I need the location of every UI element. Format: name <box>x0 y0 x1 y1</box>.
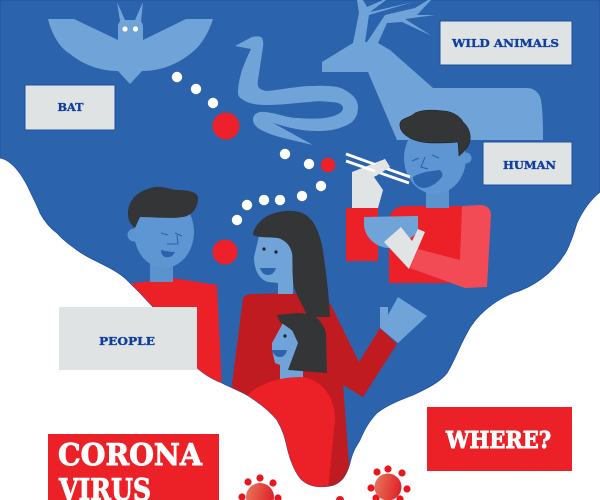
callout: where <box>427 407 572 471</box>
label: human <box>483 142 572 185</box>
label: wild animals <box>440 21 572 65</box>
title: corona virus: CORONA <box>58 438 203 473</box>
title: corona virus <box>48 434 219 500</box>
figure: human eating <box>346 110 491 288</box>
icon: virus bottom spike <box>336 496 344 500</box>
figures: family group <box>120 187 427 490</box>
red transmission dot: near people <box>212 240 238 264</box>
icon: bat <box>48 2 213 84</box>
icon: deer <box>322 0 543 140</box>
label: bat <box>25 85 115 130</box>
label: people: PEOPLE <box>99 335 155 348</box>
figure: woman <box>230 211 427 490</box>
red transmission dot: near human <box>321 158 335 172</box>
figure: man <box>128 186 222 383</box>
icon: snake <box>235 36 358 145</box>
label: wild animals: WILD ANIMALS <box>451 37 559 50</box>
dots: bat to human path <box>172 72 326 225</box>
icon: virus right <box>367 465 411 500</box>
red transmission dot: near bat <box>212 112 240 140</box>
callout: where: WHERE? <box>445 427 551 454</box>
label: bat: BAT <box>58 101 84 114</box>
label: human: HUMAN <box>503 159 556 172</box>
figure: child <box>240 313 335 490</box>
icon: virus left <box>238 474 282 500</box>
label: people <box>59 307 197 370</box>
